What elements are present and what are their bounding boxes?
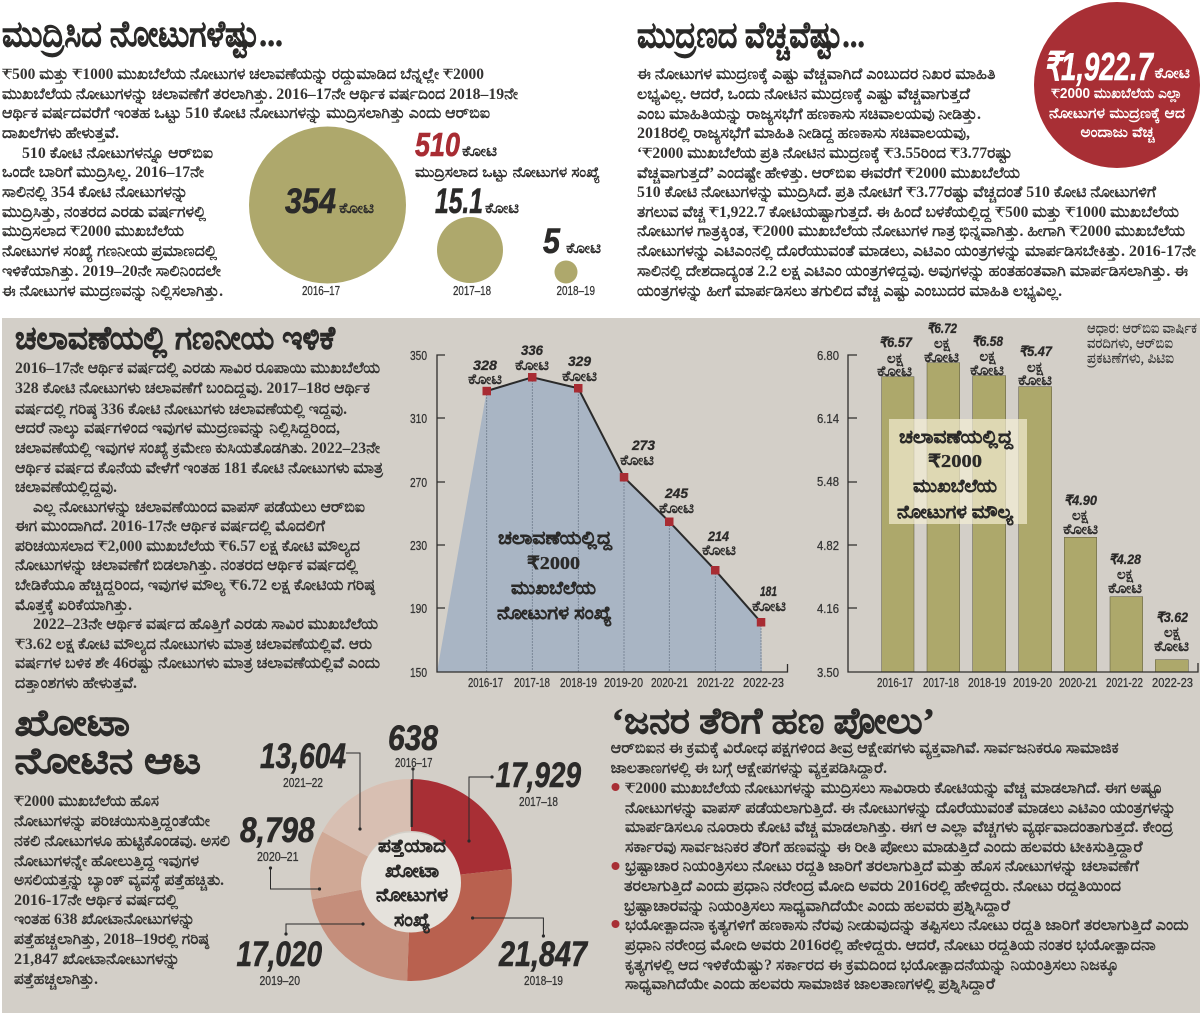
text block: notes printed intro: ಮುದ್ರಿಸಿತ್ತು, ನಂತರದ ಎರಡು ವರ್ಷಗಳಲ್ಲಿ xyxy=(2,204,207,223)
panel: loot of taxpayers' money xyxy=(611,701,1189,996)
x axis labels: 2022-23 xyxy=(743,676,784,690)
label: 638 in 2016-17: 2016–17 xyxy=(395,756,433,770)
heading: decline in circulation: ಚಲಾವಣೆಯಲ್ಲಿ ಗಣನೀಯ ಇಳಿಕೆ xyxy=(15,320,336,358)
chart title box: ಚಲಾವಣೆಯಲ್ಲಿದ್ದ xyxy=(899,427,1014,450)
callout: cost circle xyxy=(1034,2,1200,168)
data labels: ₹6.57 xyxy=(879,334,913,350)
data labels: ₹5.47 xyxy=(1019,343,1053,359)
data labels: ಕೋಟಿ xyxy=(515,358,550,374)
x axis labels: 2021-22 xyxy=(697,676,734,690)
data labels: ₹4.90 xyxy=(1064,492,1097,508)
label: 638 in 2016-17: 638 xyxy=(388,719,438,758)
data labels xyxy=(877,320,1190,655)
text block: decline body: 2022–23ನೇ ಆರ್ಥಿಕ ವರ್ಷದ ಹೊತ್ತಿಗೆ ಎರಡು ಸಾವಿರ ಮುಖಬೆಲೆಯ xyxy=(33,616,378,634)
y axis labels xyxy=(817,349,839,680)
y axis labels xyxy=(410,349,427,680)
data labels: ₹6.58 xyxy=(972,333,1003,349)
x axis labels xyxy=(468,676,784,690)
data labels: 328 xyxy=(473,357,497,373)
text block: notes printed intro: ಮುಖಬೆಲೆಯ ನೋಟುಗಳನ್ನು ಚಲಾವಣೆಗೆ ತರಲಾಗಿತ್ತು. 2016–17ನೇ ಆರ್ಥಿಕ ವರ್ಷದಿಂದ 2018–19ನೇ xyxy=(2,86,519,106)
label: 13,604 in 2021-22: 2021–22 xyxy=(283,776,323,790)
data labels: ಕೋಟಿ xyxy=(1063,522,1099,538)
bullet point: wasted printing cost: ₹2000 ಮುಖಬೆಲೆಯ ನೋಟುಗಳನ್ನು ಮುದ್ರಿಸಲು ಸಾವಿರಾರು ಕೋಟಿಯನ್ನು ವೆಚ್ಚ ಮಾಡಲಾಗಿದೆ. ಈಗ ಅಷ್ಟೂ xyxy=(625,780,1163,800)
callout: 510 crore total xyxy=(415,126,600,184)
data labels: ₹4.28 xyxy=(1109,551,1141,567)
panel: notes printed xyxy=(2,14,602,303)
bullet point: corruption xyxy=(612,858,1139,918)
source note: ವರದಿಗಳು, ಆರ್‌ಬಿಐ xyxy=(1087,336,1173,352)
chart title xyxy=(497,528,613,627)
data labels: ಕೋಟಿ xyxy=(1108,581,1143,597)
y axis labels: 3.50 xyxy=(817,666,839,680)
donut centre label: ಸಂಖ್ಯೆ xyxy=(394,910,430,934)
text block: printing cost body: 510 ಕೋಟಿ ನೋಟುಗಳನ್ನು ಮುದ್ರಿಸಿದೆ. ಪ್ರತಿ ನೋಟಿಗೆ ₹3.77ರಷ್ಟು ವೆಚ್ಚದಂತೆ 510 ಕೋಟಿ ನೋಟುಗಳಿಗೆ xyxy=(637,184,1156,204)
label: 17,020 in 2019-20 xyxy=(236,935,322,988)
text block: fake notes body: ₹2000 ಮುಖಬೆಲೆಯ ಹೊಸ xyxy=(14,793,160,810)
text block: fake notes body: ಪತ್ತೆಹಚ್ಚಲಾಗಿತ್ತು. xyxy=(14,971,98,991)
data labels: ಲಕ್ಷ xyxy=(934,336,951,352)
chart: bubble 2017-18 xyxy=(435,182,520,298)
x axis labels: 2018-19 xyxy=(560,676,597,690)
callout: 510 crore total: ಕೋಟಿ xyxy=(462,144,498,160)
y axis labels: 350 xyxy=(410,349,427,363)
chart title: ಮುಖಬೆಲೆಯ xyxy=(511,578,596,598)
data labels: ಕೋಟಿ xyxy=(752,599,787,615)
chart: value in circulation bar chart xyxy=(817,320,1198,690)
callout: cost circle: ₹1,922.7 xyxy=(1044,46,1155,89)
text block: decline body: ವರ್ಷದಲ್ಲಿ ಗರಿಷ್ಠ 336 ಕೋಟಿ ನೋಟುಗಳು ಚಲಾವಣೆಯಲ್ಲಿ ಇದ್ದವು. xyxy=(15,401,347,420)
data line xyxy=(487,377,761,622)
bullet point: terrorism: ಪ್ರಧಾನಿ ನರೇಂದ್ರ ಮೋದಿ ಅವರು 2016ರಲ್ಲಿ ಹೇಳಿದ್ದರು. ಆದರೆ, ನೋಟು ರದ್ದತಿಯ ನಂತರ ಭಯೋತ್ಪಾದನಾ xyxy=(623,937,1156,956)
text block: decline body: ಬೇಡಿಕೆಯೂ ಹೆಚ್ಚಿದ್ದರಿಂದ, ಇವುಗಳ ಮೌಲ್ಯ ₹6.72 ಲಕ್ಷ ಕೋಟಿಯ ಗರಿಷ್ಠ xyxy=(15,577,376,597)
y axis labels: 4.82 xyxy=(817,539,839,553)
chart axes xyxy=(848,355,1198,672)
text block: notes printed intro: ಆರ್ಥಿಕ ವರ್ಷದವರೆಗೆ ಇಂತಹ ಒಟ್ಟು 510 ಕೋಟಿ ನೋಟುಗಳನ್ನು ಮುದ್ರಿಸಲಾಗಿತ್ತು ಎಂದು ಆರ್‌ಬಿಐ xyxy=(2,105,490,125)
text block: fake notes body xyxy=(14,793,230,991)
label: 21,847 in 2018-19: 2018–19 xyxy=(524,974,563,988)
y axis labels: 270 xyxy=(410,476,427,490)
text block: fake notes body: ಇಂತಹ 638 ಖೋಟಾನೋಟುಗಳನ್ನು xyxy=(14,911,195,931)
chart title: ನೋಟುಗಳ ಸಂಖ್ಯೆ xyxy=(497,603,612,627)
donut centre label: ನೋಟುಗಳ xyxy=(376,885,448,905)
y axis labels: 230 xyxy=(410,539,427,553)
data labels xyxy=(468,342,787,615)
callout: 510 crore total: 510 xyxy=(415,126,461,163)
y axis labels: 6.14 xyxy=(817,412,839,426)
data labels: ₹3.62 xyxy=(1156,609,1188,625)
chart: fake notes donut xyxy=(236,719,588,988)
x axis labels: 2020-21 xyxy=(651,676,688,690)
label: 8,798 in 2020-21 xyxy=(240,811,315,864)
text block: decline body: ವರ್ಷಗಳ ಬಳಿಕ ಶೇ 46ರಷ್ಟು ನೋಟುಗಳು ಮಾತ್ರ ಚಲಾವಣೆಯಲ್ಲಿವೆ ಎಂದು xyxy=(15,655,380,675)
text block: printing cost body: 2018ರಲ್ಲಿ ರಾಜ್ಯಸಭೆಗೆ ಮಾಹಿತಿ ನೀಡಿದ್ದ ಹಣಕಾಸು ಸಚಿವಾಲಯವು, xyxy=(637,125,970,145)
data labels: 245 xyxy=(664,485,688,501)
y axis labels: 4.16 xyxy=(817,602,839,616)
callout: cost circle: ಕೋಟಿ xyxy=(1154,66,1191,82)
text block: decline body: 328 ಕೋಟಿ ನೋಟುಗಳು ಚಲಾವಣೆಗೆ ಬಂದಿದ್ದವು. 2017–18ರ ಆರ್ಥಿಕ xyxy=(15,380,370,399)
text block: fake notes body: ನೋಟುಗಳನ್ನೇ ಹೋಲುತ್ತಿದ್ದ ಇವುಗಳ xyxy=(14,853,200,872)
text block: decline body: ಈಗ ಮುಂದಾಗಿದೆ. 2016-17ನೇ ಆರ್ಥಿಕ ವರ್ಷದಲ್ಲಿ ಮೊದಲಿಗೆ xyxy=(15,518,325,537)
y axis labels: 310 xyxy=(410,412,427,426)
data labels: ಲಕ್ಷ xyxy=(1027,360,1044,376)
text block: intro: ಆರ್‌ಬಿಐನ ಈ ಕ್ರಮಕ್ಕೆ ವಿರೋಧ ಪಕ್ಷಗಳಿಂದ ತೀವ್ರ ಆಕ್ಷೇಪಗಳು ವ್ಯಕ್ತವಾಗಿವೆ. ಸಾರ್ವಜನಿಕರೂ ಸಾಮಾಜಿಕ xyxy=(611,740,1119,760)
x axis labels: 2019-20 xyxy=(1013,676,1052,690)
label: 17,020 in 2019-20: 17,020 xyxy=(236,935,322,974)
chart title: ₹2000 xyxy=(527,553,580,573)
text block: printing cost body xyxy=(637,66,1197,303)
data labels: ಕೋಟಿ xyxy=(702,543,737,559)
panel: fake notes xyxy=(14,703,230,991)
label: 8,798 in 2020-21: 2020–21 xyxy=(257,850,299,864)
chart axes xyxy=(437,355,788,672)
chart title: ಚಲಾವಣೆಯಲ್ಲಿದ್ದ xyxy=(498,528,613,551)
y axis labels: 5.48 xyxy=(817,475,839,489)
x axis labels: 2016-17 xyxy=(877,676,913,690)
chart title box: ₹2000 xyxy=(928,451,982,471)
x axis labels xyxy=(877,676,1193,690)
text block: printing cost body: ಈ ನೋಟುಗಳ ಮುದ್ರಣಕ್ಕೆ ಎಷ್ಟು ವೆಚ್ಚವಾಗಿದೆ ಎಂಬುದರ ನಿಖರ ಮಾಹಿತಿ xyxy=(637,66,996,86)
text block: notes printed intro: 510 ಕೋಟಿ ನೋಟುಗಳನ್ನೂ ಆರ್‌ಬಿಐ xyxy=(22,145,213,164)
chart: bubble 2016-17: 354 xyxy=(285,182,336,221)
panel: printing cost xyxy=(637,2,1200,303)
text block: printing cost body: ತಗಲುವ ವೆಚ್ಚ ₹1,922.7 ಕೋಟಿಯಷ್ಟಾಗುತ್ತದೆ. ಈ ಹಿಂದೆ ಬಳಕೆಯಲ್ಲಿದ್ದ ₹500 ಮತ್ತು ₹1000 ಮುಖಬೆಲೆಯ xyxy=(637,204,1179,224)
text block: intro xyxy=(611,740,1119,780)
donut centre label xyxy=(361,832,461,934)
bullet point: corruption: ಭ್ರಷ್ಟಾಚಾರ ನಿಯಂತ್ರಿಸಲು ನೋಟು ರದ್ದತಿ ಜಾರಿಗೆ ತರಲಾಗುತ್ತಿದೆ ಮತ್ತು ಹೊಸ ನೋಟುಗಳನ್ನು ಚಲಾವಣೆಗೆ xyxy=(623,858,1139,878)
label: 8,798 in 2020-21: 8,798 xyxy=(240,811,315,850)
label: 17,929 in 2017-18 xyxy=(496,756,581,809)
text block: printing cost body: ನೋಟುಗಳನ್ನು ಎಟಿಎಂನಲ್ಲಿ ದೊರೆಯುವಂತೆ ಮಾಡಲು, ಎಟಿಎಂ ಯಂತ್ರಗಳನ್ನು ಮಾರ್ಪಡಿಸಬೇಕಿತ್ತು. 2016-17ನೇ xyxy=(637,243,1197,263)
x axis labels: 2017-18 xyxy=(923,676,959,690)
chart: bubble 2018-19 xyxy=(543,222,602,298)
text block: printing cost body: ಯಂತ್ರಗಳನ್ನು ಹೀಗೆ ಮಾರ್ಪಡಿಸಲು ತಗುಲಿದ ವೆಚ್ಚ ಎಷ್ಟು ಎಂಬುದರ ಮಾಹಿತಿ ಲಭ್ಯವಿಲ್ಲ. xyxy=(637,283,1062,303)
data labels: ಕೋಟಿ xyxy=(1018,373,1053,389)
source note xyxy=(1087,321,1197,367)
chart: bubble 2018-19: 2018–19 xyxy=(556,284,595,298)
text block: decline body xyxy=(15,360,384,694)
bullet point: terrorism: ಕೃತ್ಯಗಳಲ್ಲಿ ಆದ ಇಳಿಕೆಯೆಷ್ಟು? ಸರ್ಕಾರದ ಈ ಕ್ರಮದಿಂದ ಭಯೋತ್ಪಾದನೆಯನ್ನು ನಿಯಂತ್ರಿಸಲು ನಿಜಕ್ಕೂ xyxy=(625,957,1119,977)
data labels: ಕೋಟಿ xyxy=(1154,639,1190,655)
bullet point: terrorism: ಸಾಧ್ಯವಾಗಿದೆಯೇ ಎಂದು ಹಲವರು ಸಾಮಾಜಿಕ ಜಾಲತಾಣಗಳಲ್ಲಿ ಪ್ರಶ್ನಿಸಿದ್ದಾರೆ xyxy=(625,976,995,996)
text block: notes printed intro xyxy=(2,66,519,303)
text block: fake notes body: ನಕಲಿ ನೋಟುಗಳೂ ಹುಟ್ಟಿಕೊಂಡವು. ಅಸಲಿ xyxy=(14,833,230,852)
chart: notes in circulation area chart xyxy=(410,342,788,690)
bullet point: wasted printing cost: ಸರ್ಕಾರವು ಸಾರ್ವಜನಿಕರ ತೆರಿಗೆ ಹಣವನ್ನು ಈ ರೀತಿ ಪೋಲು ಮಾಡುತ್ತಿದೆ ಎಂದು ಹಲವರು ಟೀಕಿಸುತ್ತಿದ್ದಾರೆ xyxy=(625,839,1143,859)
bullet point: wasted printing cost xyxy=(612,780,1176,859)
text block: notes printed intro: ನೋಟುಗಳ ಸಂಖ್ಯೆ ಗಣನೀಯ ಪ್ರಮಾಣದಲ್ಲಿ xyxy=(2,243,218,263)
chart: bubble 2016-17: ಕೋಟಿ xyxy=(339,201,375,217)
bullet point: terrorism: ಭಯೋತ್ಪಾದನಾ ಕೃತ್ಯಗಳಿಗೆ ಹಣಕಾಸು ನೆರವು ನೀಡುವುದನ್ನು ತಪ್ಪಿಸಲು ನೋಟು ರದ್ದತಿ ಜಾರಿಗೆ ತರಲಾಗುತ್ತಿದೆ ಎಂದು xyxy=(625,917,1189,937)
chart: bubble 2017-18: 15.1 xyxy=(435,182,483,221)
heading: fake notes xyxy=(14,703,201,781)
text block: printing cost body: ವೆಚ್ಚವಾಗುತ್ತದೆ’ ಎಂದಷ್ಟೇ ಹೇಳಿತ್ತು. ಆರ್‌ಬಿಐ ಈವರೆಗೆ ₹2000 ಮುಖಬೆಲೆಯ xyxy=(637,165,1020,185)
data labels: ಕೋಟಿ xyxy=(468,372,503,388)
bullet point: corruption: ತರಲಾಗುತ್ತಿದೆ ಎಂದು ಪ್ರಧಾನಿ ನರೇಂದ್ರ ಮೋದಿ ಅವರು 2016ರಲ್ಲಿ ಹೇಳಿದ್ದರು. ನೋಟು ರದ್ದತಿಯಿಂದ xyxy=(624,878,1121,897)
chart: bubble 2017-18: ಕೋಟಿ xyxy=(485,201,520,217)
data markers xyxy=(482,373,765,626)
data labels: ಲಕ್ಷ xyxy=(980,349,997,365)
text block: notes printed intro: ಇಳಿಕೆಯಾಗಿತ್ತು. 2019–20ನೇ ಸಾಲಿನಿಂದಲೇ xyxy=(2,263,222,282)
y axis labels: 150 xyxy=(410,666,427,680)
bullet point: corruption: ಭ್ರಷ್ಟಾಚಾರವನ್ನು ನಿಯಂತ್ರಿಸಲು ಸಾಧ್ಯವಾಗಿದೆಯೇ ಎಂದು ಹಲವರು ಪ್ರಶ್ನಿಸಿದ್ದಾರೆ xyxy=(622,898,1010,918)
data labels: ಕೋಟಿ xyxy=(562,369,598,385)
text block: decline body: ಆದರೆ ನಾಲ್ಕು ವರ್ಷಗಳಿಂದ ಇವುಗಳ ಮುದ್ರಣವನ್ನು ನಿಲ್ಲಿಸಿದ್ದರಿಂದ, xyxy=(15,420,340,440)
x axis labels: 2016-17 xyxy=(468,676,503,690)
x axis labels: 2020-21 xyxy=(1059,676,1097,690)
label: 638 in 2016-17 xyxy=(388,719,438,770)
text block: decline body: ಚಲಾವಣೆಯಲ್ಲಿದ್ದವು. xyxy=(15,479,117,498)
text block: decline body: ಮೊತ್ತಕ್ಕೆ ಏರಿಕೆಯಾಗಿತ್ತು. xyxy=(15,597,132,616)
text block: fake notes body: 21,847 ಖೋಟಾನೋಟುಗಳನ್ನು xyxy=(14,951,180,971)
area fill xyxy=(437,377,762,672)
data labels: ಲಕ್ಷ xyxy=(1117,567,1134,583)
data labels: ಲಕ್ಷ xyxy=(887,351,904,367)
chart title box: ಮುಖಬೆಲೆಯ xyxy=(913,476,997,496)
heading: fake notes: ಖೋಟಾ xyxy=(14,703,130,743)
text block: decline body: ನೋಟುಗಳನ್ನು ಚಲಾವಣೆಗೆ ಬಿಡಲಾಗಿತ್ತು. ನಂತರದ ಆರ್ಥಿಕ ವರ್ಷದಲ್ಲಿ xyxy=(15,557,359,577)
text block: notes printed intro: ಸಾಲಿನಲ್ಲಿ 354 ಕೋಟಿ ನೋಟುಗಳನ್ನು xyxy=(2,184,188,204)
heading: fake notes: ನೋಟಿನ ಆಟ xyxy=(14,741,201,781)
data labels: 214 xyxy=(707,528,729,544)
leader lines xyxy=(269,753,545,938)
chart: bubble 2018-19: ಕೋಟಿ xyxy=(566,241,602,257)
data labels: ₹6.72 xyxy=(927,320,957,336)
heading: notes printed: ಮುದ್ರಿಸಿದ ನೋಟುಗಳೆಷ್ಟು... xyxy=(2,14,283,58)
data labels: 336 xyxy=(521,342,543,358)
data labels: ಕೋಟಿ xyxy=(970,363,1005,379)
source note: ಪ್ರಕಟಣೆಗಳು, ಪಿಟಿಐ xyxy=(1087,351,1174,367)
text block: fake notes body: ನೋಟುಗಳನ್ನು ಪರಿಚಯಿಸುತ್ತಿದ್ದಂತೆಯೇ xyxy=(14,813,211,833)
bullet point: wasted printing cost: ನೋಟುಗಳನ್ನು ವಾಪಸ್ ಪಡೆಯಲಾಗುತ್ತಿದೆ. ಈ ನೋಟುಗಳನ್ನು ದೊರೆಯುವಂತೆ ಮಾಡಲು ಎಟಿಎಂ ಯಂತ್ರಗಳನ್ನು xyxy=(625,800,1176,820)
text block: fake notes body: 2016-17ನೇ ಆರ್ಥಿಕ ವರ್ಷದಲ್ಲಿ xyxy=(14,892,179,911)
data labels: 329 xyxy=(568,353,591,369)
data labels: ಕೋಟಿ xyxy=(620,453,655,469)
text block: decline body: ₹3.62 ಲಕ್ಷ ಕೋಟಿ ಮೌಲ್ಯದ ನೋಟುಗಳು ಮಾತ್ರ ಚಲಾವಣೆಯಲ್ಲಿವೆ. ಆರು xyxy=(15,636,372,656)
data labels: ಕೋಟಿ xyxy=(659,501,695,517)
callout: cost circle: ನೋಟುಗಳ ಮುದ್ರಣಕ್ಕೆ ಆದ xyxy=(1049,106,1186,124)
label: 17,929 in 2017-18: 2017–18 xyxy=(519,795,558,809)
text block: notes printed intro: ಒಂದೇ ಬಾರಿಗೆ ಮುದ್ರಿಸಿಲ್ಲ. 2016–17ನೇ xyxy=(2,164,205,183)
text block: fake notes body: ಪತ್ತೆಹಚ್ಚಲಾಗಿತ್ತು, 2018–19ರಲ್ಲಿ ಗರಿಷ್ಠ xyxy=(14,931,210,951)
x axis labels: 2021-22 xyxy=(1106,676,1143,690)
text block: decline body: ಪರಿಚಯಿಸಲಾದ ₹2,000 ಮುಖಬೆಲೆಯ ₹6.57 ಲಕ್ಷ ಕೋಟಿ ಮೌಲ್ಯದ xyxy=(15,538,360,558)
data labels: ಕೋಟಿ xyxy=(877,364,913,380)
text block: decline body: 2016–17ನೇ ಆರ್ಥಿಕ ವರ್ಷದಲ್ಲಿ ಎರಡು ಸಾವಿರ ರೂಪಾಯಿ ಮುಖಬೆಲೆಯ xyxy=(15,360,380,379)
text block: printing cost body: ಎಂಬ ಮಾಹಿತಿಯನ್ನು ರಾಜ್ಯಸಭೆಗೆ ಹಣಕಾಸು ಸಚಿವಾಲಯವು ನೀಡಿತ್ತು. xyxy=(637,106,981,126)
data labels: 181 xyxy=(760,583,777,599)
x axis labels: 2018-19 xyxy=(968,676,1006,690)
y axis labels: 6.80 xyxy=(817,349,839,363)
chart title box xyxy=(889,419,1027,526)
bullet point: wasted printing cost: ಮಾರ್ಪಡಿಸಲೂ ನೂರಾರು ಕೋಟಿ ವೆಚ್ಚ ಮಾಡಲಾಗಿತ್ತು. ಈಗ ಆ ಎಲ್ಲಾ ವೆಚ್ಚಗಳು ವ್ಯರ್ಥವಾದಂತಾಗುತ್ತದೆ. ಕೇಂದ್ರ xyxy=(625,819,1174,839)
donut segments xyxy=(336,805,486,955)
donut centre label: ಪತ್ತೆಯಾದ xyxy=(378,836,446,858)
text block: decline body: ದತ್ತಾಂಶಗಳು ಹೇಳುತ್ತವೆ. xyxy=(15,675,137,694)
callout: cost circle: ಅಂದಾಜು ವೆಚ್ಚ xyxy=(1080,125,1155,144)
text block: printing cost body: ಸಾಲಿನಲ್ಲಿ ದೇಶದಾದ್ಯಂತ 2.2 ಲಕ್ಷ ಎಟಿಎಂ ಯಂತ್ರಗಳಿದ್ದವು. ಅವುಗಳನ್ನು ಹಂತಹಂತವಾಗಿ ಮಾರ್ಪಡಿಸಲಾಗಿತ್ತು. ಈ xyxy=(637,263,1189,283)
chart: bubble 2017-18: 2017–18 xyxy=(453,284,491,298)
x axis labels: 2022-23 xyxy=(1152,676,1193,690)
data labels: 273 xyxy=(631,437,655,453)
text block: printing cost body: ನೋಟುಗಳ ಗಾತ್ರಕ್ಕಿಂತ, ₹2000 ಮುಖಬೆಲೆಯ ನೋಟುಗಳ ಗಾತ್ರ ಭಿನ್ನವಾಗಿತ್ತು. ಹೀಗಾಗಿ ₹2000 ಮುಖಬೆಲೆಯ xyxy=(637,223,1185,242)
text block: decline body: ಎಲ್ಲ ನೋಟುಗಳನ್ನು ಚಲಾವಣೆಯಿಂದ ವಾಪಸ್ ಪಡೆಯಲು ಆರ್‌ಬಿಐ xyxy=(33,499,365,519)
text block: notes printed intro: ದಾಖಲೆಗಳು ಹೇಳುತ್ತವೆ. xyxy=(2,125,119,143)
chart: bubble 2018-19: 5 xyxy=(543,222,560,261)
text block: notes printed intro: ₹500 ಮತ್ತು ₹1000 ಮುಖಬೆಲೆಯ ನೋಟುಗಳ ಚಲಾವಣೆಯನ್ನು ರದ್ದುಮಾಡಿದ ಬೆನ್ನಲ್ಲೇ ₹2000 xyxy=(2,66,484,86)
x axis labels: 2019-20 xyxy=(604,676,643,690)
label: 13,604 in 2021-22 xyxy=(260,737,346,790)
label: 17,020 in 2019-20: 2019–20 xyxy=(260,974,300,988)
bullet point: terrorism xyxy=(612,917,1189,996)
callout: 510 crore total: ಮುದ್ರಿಸಲಾದ ಒಟ್ಟು ನೋಟುಗಳ ಸಂಖ್ಯೆ xyxy=(415,165,600,184)
heading: printing cost: ಮುದ್ರಣದ ವೆಚ್ಚವೆಷ್ಟು... xyxy=(637,15,865,61)
bars xyxy=(882,363,1188,672)
text block: decline body: ಆರ್ಥಿಕ ವರ್ಷದ ಕೊನೆಯ ವೇಳೆಗೆ ಇಂತಹ 181 ಕೋಟಿ ನೋಟುಗಳು ಮಾತ್ರ xyxy=(15,460,384,479)
chart: bubble 2016-17: 2016–17 xyxy=(302,284,340,298)
data labels: ಕೋಟಿ xyxy=(924,350,960,366)
label: 17,929 in 2017-18: 17,929 xyxy=(496,756,581,795)
text block: intro: ಜಾಲತಾಣಗಳಲ್ಲಿ ಈ ಬಗ್ಗೆ ಆಕ್ಷೇಪಗಳನ್ನು ವ್ಯಕ್ತಪಡಿಸಿದ್ದಾರೆ. xyxy=(611,760,887,780)
text block: decline body: ಚಲಾವಣೆಯಲ್ಲಿ ಇವುಗಳ ಸಂಖ್ಯೆ ಕ್ರಮೇಣ ಕುಸಿಯತೊಡಗಿತು. 2022–23ನೇ xyxy=(15,440,381,460)
x axis labels: 2017-18 xyxy=(514,676,550,690)
data labels: ಲಕ್ಷ xyxy=(1072,508,1089,524)
data labels: ಲಕ್ಷ xyxy=(1164,625,1181,641)
text block: fake notes body: ಅಸಲಿಯತ್ತನ್ನು ಬ್ಯಾಂಕ್ ವ್ಯವಸ್ಥೆ ಪತ್ತೆಹಚ್ಚಿತು. xyxy=(14,872,224,893)
label: 21,847 in 2018-19 xyxy=(498,935,588,988)
y axis labels: 190 xyxy=(410,602,427,616)
heading: loot of taxpayers' money: ‘ಜನರ ತೆರಿಗೆ ಹಣ ಪೋಲು’ xyxy=(612,701,935,741)
chart title box: ನೋಟುಗಳ ಮೌಲ್ಯ xyxy=(897,502,1014,526)
callout: cost circle: ₹2000 ಮುಖಬೆಲೆಯ ಎಲ್ಲಾ xyxy=(1051,86,1182,104)
label: 13,604 in 2021-22: 13,604 xyxy=(260,737,346,776)
text block: notes printed intro: ಮುದ್ರಿಸಲಾದ ₹2000 ಮುಖಬೆಲೆಯ xyxy=(2,223,184,242)
text block: printing cost body: ಲಭ್ಯವಿಲ್ಲ. ಆದರೆ, ಒಂದು ನೋಟಿನ ಮುದ್ರಣಕ್ಕೆ ಎಷ್ಟು ವೆಚ್ಚವಾಗುತ್ತದೆ xyxy=(637,86,970,106)
text block: printing cost body: ‘₹2000 ಮುಖಬೆಲೆಯ ಪ್ರತಿ ನೋಟಿನ ಮುದ್ರಣಕ್ಕೆ ₹3.55ರಿಂದ ₹3.77ರಷ್ಟು xyxy=(637,145,1012,165)
chart: bubble 2016-17 xyxy=(249,126,406,298)
donut centre label: ಖೋಟಾ xyxy=(385,861,439,881)
panel: decline in circulation xyxy=(15,320,384,694)
label: 21,847 in 2018-19: 21,847 xyxy=(498,935,588,974)
text block: notes printed intro: ಈ ನೋಟುಗಳ ಮುದ್ರಣವನ್ನು ನಿಲ್ಲಿಸಲಾಗಿತ್ತು. xyxy=(2,283,223,303)
